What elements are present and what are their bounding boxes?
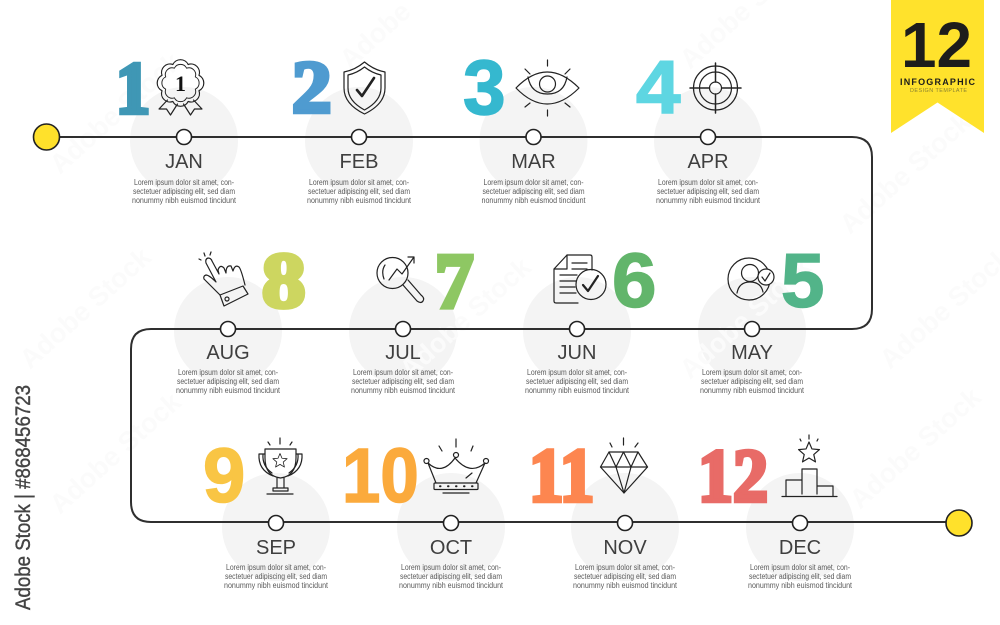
milestone: February: nonummy nibh euismod tincidunt [307,196,412,205]
milestone: February: 2 [292,46,331,128]
milestone: August: AUG [206,342,250,364]
milestone: September: sectetuer adipiscing elit, sed diam [225,572,327,581]
node: June [570,322,584,336]
milestone: September [203,434,329,590]
milestone: August: nonummy nibh euismod tincidunt [176,386,281,395]
milestone: April [636,46,761,205]
milestone: October: nonummy nibh euismod tincidunt [399,581,504,590]
milestone: December: sectetuer adipiscing elit, sed diam [749,572,851,581]
milestone: January: sectetuer adipiscing elit, sed diam [133,187,235,196]
milestone: March [463,45,586,205]
milestone: September: SEP [256,537,296,559]
watermark: Adobe Stock [674,251,817,384]
milestone: February: Lorem ipsum dolor sit amet, con- [309,178,409,187]
milestone: June: Lorem ipsum dolor sit amet, con- [527,368,627,377]
milestone: May [700,239,824,395]
icon: diamond [600,438,648,493]
ribbon badge: 12 [901,9,972,81]
milestone: April: sectetuer adipiscing elit, sed diam [657,187,759,196]
milestone: February: sectetuer adipiscing elit, sed diam [308,187,410,196]
milestone: February [292,46,412,205]
milestone: July: Lorem ipsum dolor sit amet, con- [353,368,453,377]
milestone: December: nonummy nibh euismod tincidunt [748,581,853,590]
milestone: March: nonummy nibh euismod tincidunt [482,196,586,205]
icon: target [690,63,741,113]
milestone: March: MAR [511,151,556,173]
milestone: July: nonummy nibh euismod tincidunt [351,386,456,395]
icon: shield [344,62,385,114]
milestone: January: Lorem ipsum dolor sit amet, con- [134,178,234,187]
milestone: June: 6 [612,237,656,324]
watermark: Adobe Stock [834,106,977,239]
milestone: January: JAN [165,151,203,173]
watermark: Adobe Stock [44,386,187,519]
milestone: June [525,237,656,395]
milestone: September: Lorem ipsum dolor sit amet, con- [226,563,326,572]
milestone: August: Lorem ipsum dolor sit amet, con- [178,368,278,377]
milestone: July: sectetuer adipiscing elit, sed diam [352,377,454,386]
milestone: May: 5 [781,239,824,324]
node: December [792,516,808,530]
node: February [352,130,366,144]
milestone: January: 1 [116,48,150,130]
node: November [618,516,632,530]
gray circles behind months [130,87,854,581]
milestone: April: APR [687,151,729,173]
milestone: June: sectetuer adipiscing elit, sed diam [526,377,628,386]
icon: eye [516,60,579,116]
milestone: October: 10 [342,434,419,519]
milestone: September: 9 [203,434,245,519]
milestone: November [529,433,678,590]
node: August [220,322,236,336]
milestone: December: 12 [698,434,768,518]
milestone: July: JUL [385,342,421,364]
milestone: February: FEB [340,151,378,173]
milestone: March: 3 [463,45,506,131]
milestone: July: 7 [435,238,473,325]
icon: medal [157,60,204,115]
milestone: November: NOV [603,537,647,559]
watermark: Adobe Stock [44,46,187,179]
milestone: April: nonummy nibh euismod tincidunt [656,196,761,205]
timeline path [46,137,959,522]
milestone: November: 11 [529,433,594,518]
ribbon badge: DESIGN TEMPLATE [910,88,967,94]
ribbon badge [891,0,984,133]
milestone: December [698,434,853,590]
milestone: May: nonummy nibh euismod tincidunt [700,386,805,395]
milestone: May: sectetuer adipiscing elit, sed diam [701,377,803,386]
stock credit: Adobe Stock | #868456723 [12,385,35,610]
ribbon badge: INFOGRAPHIC [900,77,976,87]
icon: crown [424,439,488,493]
milestone: September: nonummy nibh euismod tincidunt [224,581,329,590]
milestone: May: Lorem ipsum dolor sit amet, con- [702,368,802,377]
milestone: November: nonummy nibh euismod tincidunt [573,581,678,590]
icon: user with check [728,258,774,300]
milestone: March: Lorem ipsum dolor sit amet, con- [484,178,584,187]
node: July [396,322,410,336]
node: April [700,130,716,144]
node: May [744,322,760,336]
milestone: August: 8 [262,237,306,324]
milestone: July [351,238,473,395]
node: March [526,130,541,144]
milestone: December: DEC [779,537,821,559]
icon: pointing hand [199,252,248,306]
milestone: November: sectetuer adipiscing elit, sed diam [574,572,676,581]
icon: document with check [554,255,606,303]
start marker [34,124,60,150]
milestone: May: MAY [731,342,773,364]
milestone: January [116,48,237,205]
milestone: November: Lorem ipsum dolor sit amet, con- [575,563,675,572]
milestone: August [176,237,306,395]
milestone: April: Lorem ipsum dolor sit amet, con- [658,178,758,187]
icon: trophy [259,438,302,494]
milestone: April: 4 [636,46,680,129]
end marker [946,510,972,536]
watermark: Adobe Stock [844,381,987,514]
icon: medal: 1 [175,71,186,96]
milestone: January: nonummy nibh euismod tincidunt [132,196,237,205]
milestone: June: JUN [558,342,596,364]
milestone: March: sectetuer adipiscing elit, sed diam [482,187,585,196]
icon: podium with star [782,435,837,496]
watermark: Adobe Stock [14,241,157,374]
watermark: Adobe Stock [394,251,537,384]
milestone: October: Lorem ipsum dolor sit amet, con- [401,563,501,572]
milestone: October: sectetuer adipiscing elit, sed diam [400,572,502,581]
milestone: August: sectetuer adipiscing elit, sed diam [177,377,279,386]
node: September [268,516,284,530]
milestone: October [342,434,504,590]
icon: magnifier with growth arrow [377,257,424,302]
milestone: June: nonummy nibh euismod tincidunt [525,386,630,395]
milestone: October: OCT [430,537,472,559]
node: January [176,130,192,144]
node: October [444,516,458,530]
milestone: December: Lorem ipsum dolor sit amet, con- [750,563,850,572]
